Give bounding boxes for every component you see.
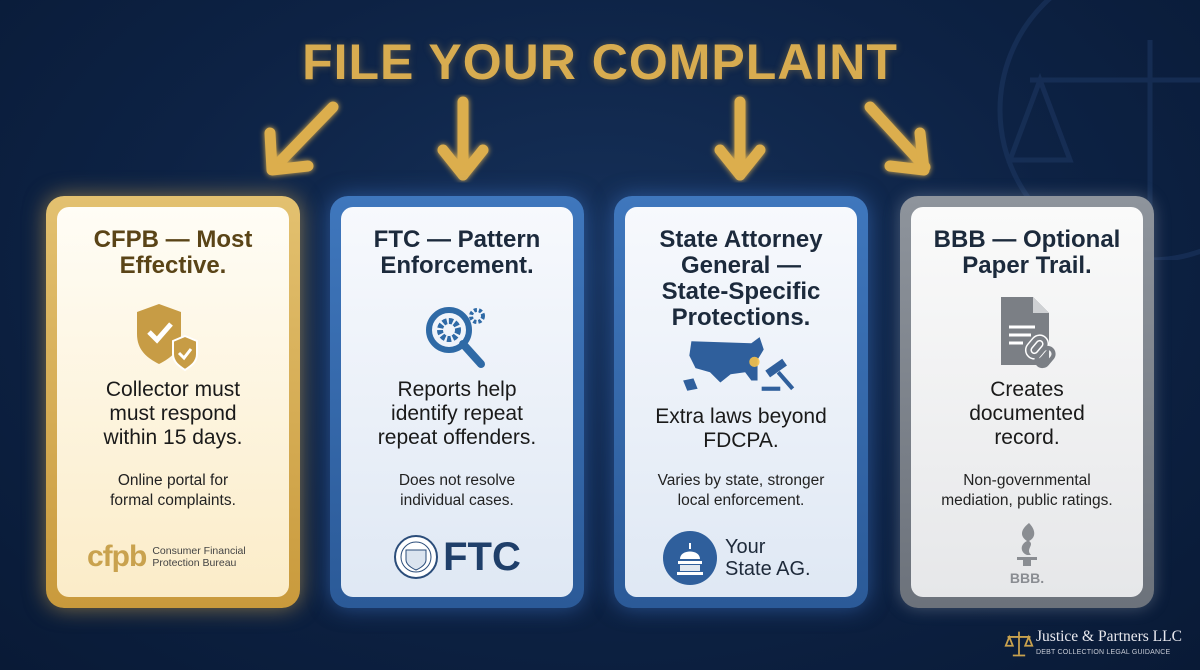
heading — [374, 226, 540, 279]
small text: individual cases. — [400, 492, 514, 509]
small text — [941, 472, 1113, 509]
heading: Enforcement. — [380, 252, 534, 279]
logo: Your State AG: Your — [725, 536, 765, 558]
footer brand: Justice & Partners LLC — [1036, 628, 1182, 645]
logo: FTC — [394, 534, 521, 579]
logo: Your State AG — [663, 531, 811, 585]
logo: Your State AG: State AG. — [725, 558, 811, 580]
logo: cfpb: Protection Bureau — [152, 557, 236, 569]
heading: General — — [681, 252, 801, 279]
panel: CFPB — [46, 196, 300, 608]
heading: Effective. — [120, 252, 226, 279]
heading: Paper Trail. — [962, 252, 1092, 279]
title: FILE YOUR COMPLAINT — [302, 34, 898, 90]
footer brand — [1004, 628, 1182, 656]
heading — [94, 226, 252, 279]
body text: Creates — [990, 378, 1064, 401]
arrow 2 — [443, 102, 483, 175]
panel: BBB — [900, 196, 1154, 608]
heading — [934, 226, 1120, 279]
icon: magnifier gear — [426, 307, 485, 368]
logo: cfpb: Consumer Financial — [152, 545, 246, 557]
body text: identify repeat — [391, 402, 523, 425]
small text: Varies by state, stronger — [658, 472, 824, 489]
body text: Extra laws beyond — [655, 405, 827, 428]
arrow 3 — [720, 102, 760, 175]
body text: must respond — [109, 402, 237, 425]
arrows — [260, 94, 935, 182]
heading: Protections. — [672, 304, 810, 331]
heading: BBB — Optional — [934, 226, 1120, 253]
arrow 1 — [270, 107, 333, 170]
icon: shields — [137, 304, 198, 371]
heading — [659, 226, 823, 331]
small text — [658, 472, 824, 509]
body text — [378, 378, 536, 449]
logo: FTC: FTC — [443, 534, 521, 578]
heading: State-Specific — [662, 278, 820, 305]
heading: State Attorney — [659, 226, 823, 253]
logo: cfpb — [87, 540, 246, 573]
small text: Non-governmental — [963, 472, 1091, 489]
panel: FTC — [330, 196, 584, 608]
body text: repeat offenders. — [378, 426, 536, 449]
small text: local enforcement. — [678, 492, 804, 509]
icon: document with link — [1001, 297, 1056, 368]
small text: Does not resolve — [399, 472, 515, 489]
small text — [399, 472, 515, 509]
body text: FDCPA. — [703, 429, 779, 452]
body text: record. — [994, 426, 1060, 449]
body text: documented — [969, 402, 1085, 425]
arrow 4 — [870, 107, 925, 170]
logo: BBB: BBB. — [1010, 570, 1044, 586]
icon: US map and gavel — [683, 337, 794, 391]
small text — [110, 472, 236, 509]
panel: State AG — [614, 196, 868, 608]
body text — [969, 378, 1085, 449]
logo: cfpb: cfpb — [87, 540, 146, 573]
small text: mediation, public ratings. — [941, 492, 1113, 509]
icon: scales — [1004, 632, 1034, 656]
body text: within 15 days. — [104, 426, 242, 449]
footer brand: DEBT COLLECTION LEGAL GUIDANCE — [1036, 649, 1170, 656]
body text: Collector must — [106, 378, 240, 401]
heading: CFPB — Most — [94, 226, 252, 253]
heading: FTC — Pattern — [374, 226, 540, 253]
body text: Reports help — [397, 378, 517, 401]
body text — [104, 378, 242, 449]
body text — [655, 405, 827, 452]
small text: Online portal for — [118, 472, 228, 489]
logo: BBB — [1010, 523, 1044, 586]
background scales watermark — [998, 0, 1200, 260]
small text: formal complaints. — [110, 492, 236, 509]
